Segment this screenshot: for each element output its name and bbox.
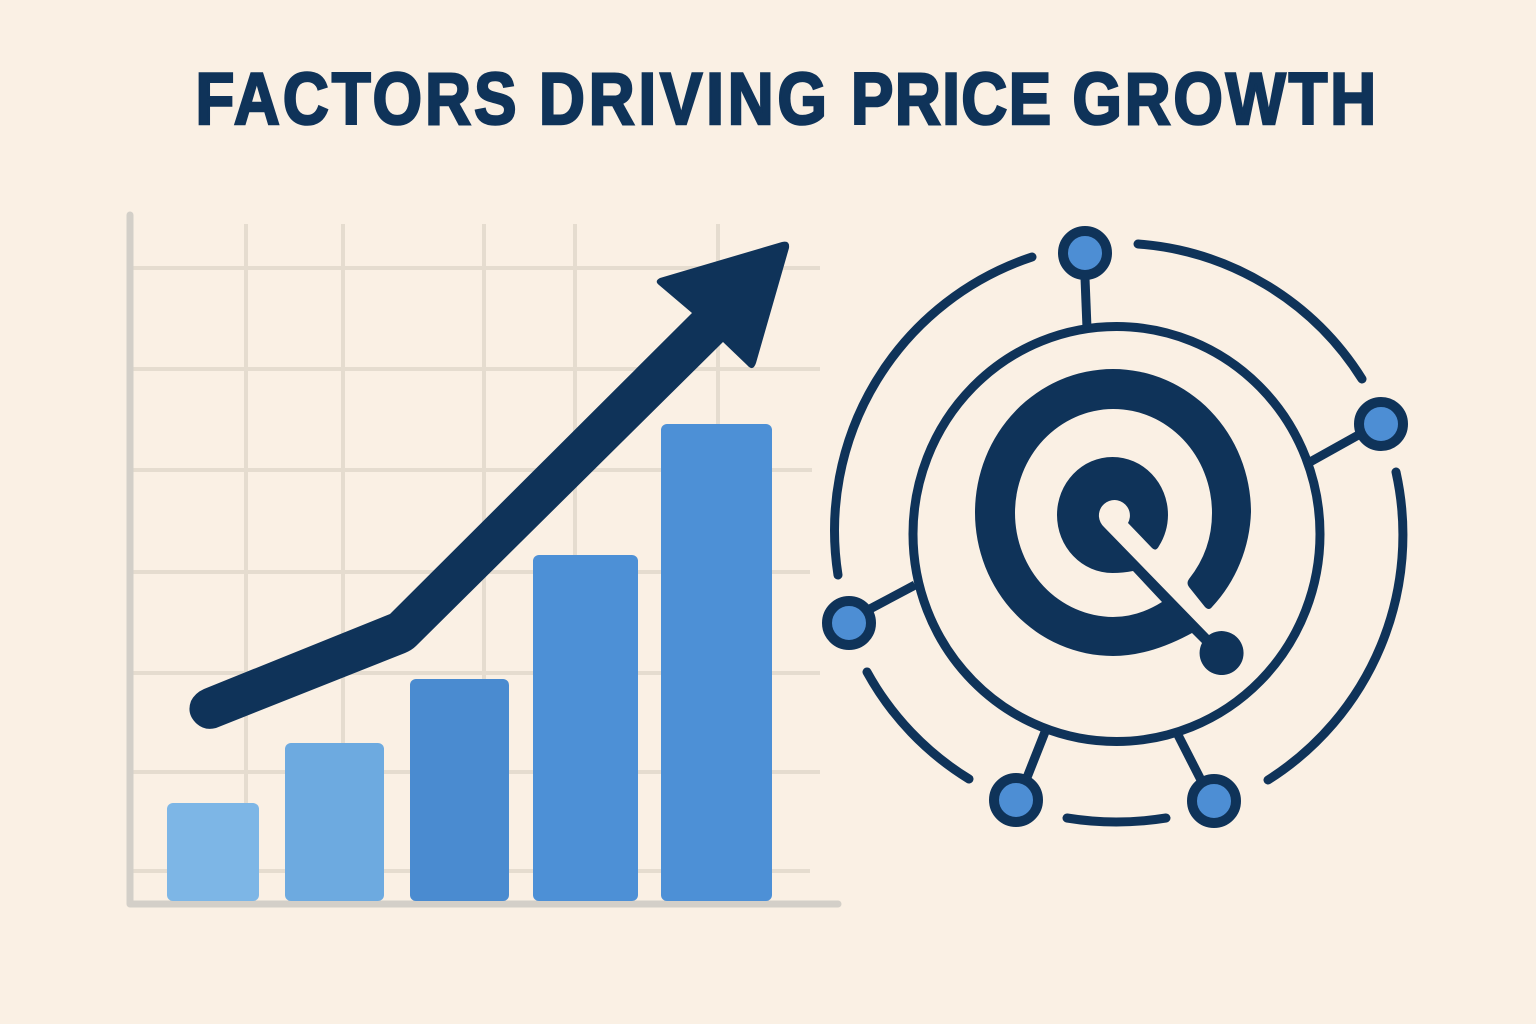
node bottom right bbox=[1192, 779, 1236, 823]
target network icon bbox=[835, 244, 1403, 822]
node bottom left bbox=[994, 778, 1038, 822]
bar 4 bbox=[533, 555, 638, 901]
node right bbox=[1359, 402, 1403, 446]
title: FACTORS bbox=[196, 59, 517, 140]
bar chart bbox=[130, 215, 838, 904]
bar 5 bbox=[661, 424, 772, 901]
growth arrow bbox=[189, 242, 789, 729]
outer ring segments bbox=[835, 244, 1403, 822]
title: PRICE bbox=[851, 59, 1051, 140]
title bbox=[196, 59, 1376, 140]
bar 1 bbox=[167, 803, 259, 901]
bar 2 bbox=[285, 743, 384, 901]
axes bbox=[130, 215, 838, 904]
node left bbox=[827, 601, 871, 645]
title: DRIVING bbox=[539, 59, 827, 140]
title: GROWTH bbox=[1072, 59, 1376, 140]
bar 3 bbox=[410, 679, 509, 901]
target spiral with needle bbox=[975, 369, 1251, 675]
connectors bbox=[868, 278, 1362, 782]
node top bbox=[1063, 231, 1107, 275]
inner circle bbox=[913, 326, 1320, 742]
